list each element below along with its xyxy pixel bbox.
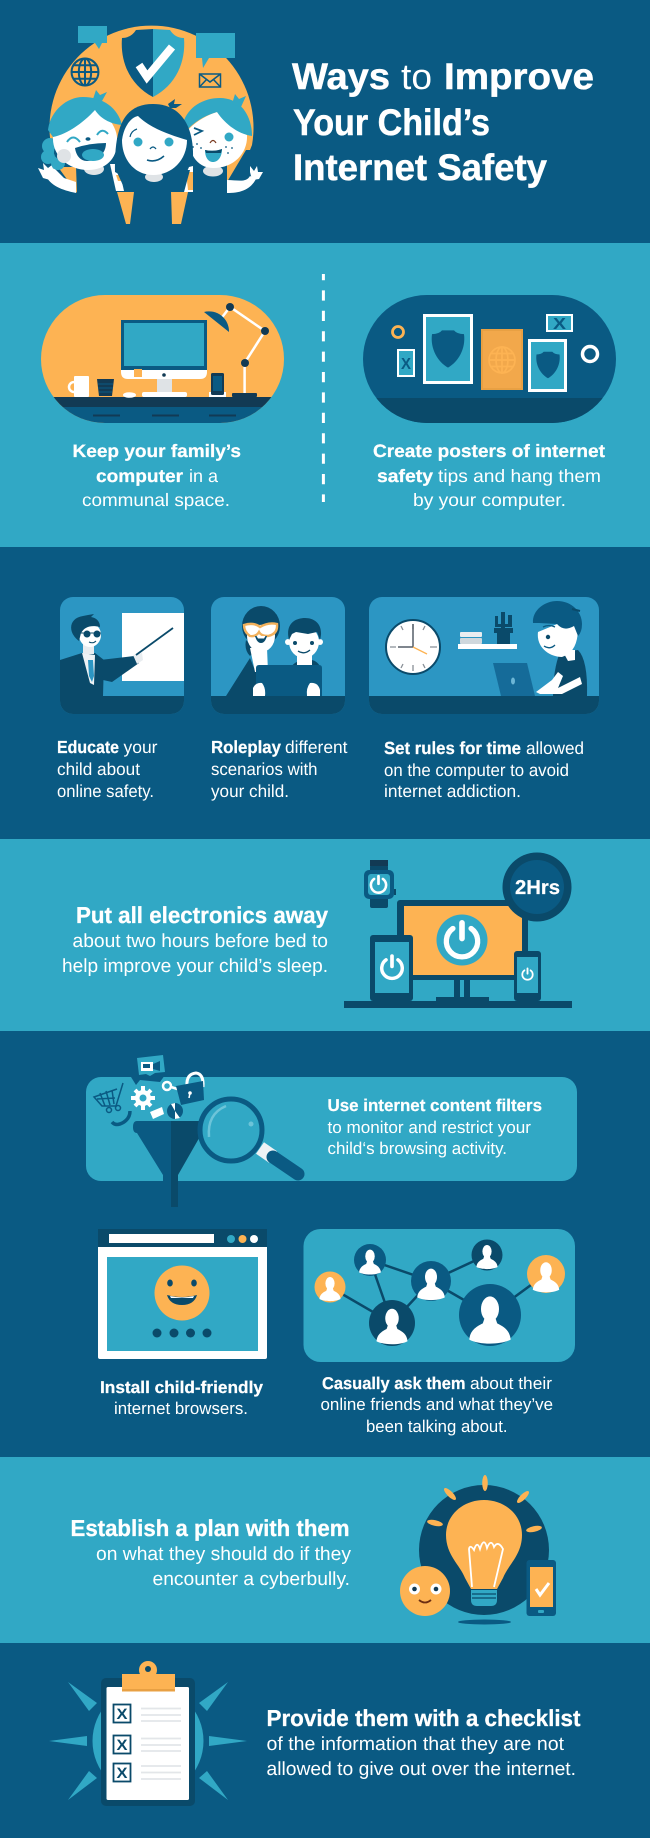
check items: X (116, 1706, 128, 1723)
text: set rules: allowed (526, 738, 584, 758)
laptop (493, 663, 535, 696)
cup (97, 379, 114, 396)
smiley face (154, 1266, 210, 1320)
panel: clock and boy at laptop (369, 597, 599, 714)
text: casually ask: online friends and what they’ve (320, 1395, 553, 1414)
clip (122, 1661, 175, 1692)
panel: roleplay (211, 597, 345, 714)
node 1 (314, 1272, 346, 1302)
text: establish a plan: encounter a cyberbully. (152, 1569, 350, 1590)
child centre (110, 99, 193, 224)
lamp (204, 303, 269, 397)
panel: teacher (60, 597, 184, 714)
text: casually ask (320, 1374, 553, 1436)
monitor (121, 320, 207, 397)
title: Improve (444, 56, 594, 97)
text: create posters: by your computer. (413, 490, 566, 510)
white board (122, 613, 184, 681)
check items: X (116, 1765, 128, 1782)
badge: 2Hrs (502, 852, 572, 922)
text: create posters: safety (377, 466, 433, 486)
teal band 5 background (0, 1457, 650, 1643)
text: put all electronics away (62, 902, 328, 977)
icon: envelope (200, 74, 220, 87)
text: put all electronics away: Put all electronics away (76, 902, 328, 928)
icon: key (163, 1082, 187, 1096)
panel: online friends network (304, 1229, 575, 1362)
divider: dashed line (322, 274, 325, 502)
face (400, 1566, 450, 1616)
phone (209, 373, 226, 397)
text: content filters (328, 1096, 542, 1158)
phone with check (526, 1560, 556, 1616)
text: keep computer in communal space: computer (96, 466, 183, 486)
text: educate: online safety. (57, 781, 154, 801)
funnel (133, 1121, 202, 1207)
node 4 (411, 1261, 451, 1301)
text: educate (57, 737, 158, 801)
text: set rules (384, 738, 584, 801)
icon: lock (176, 1073, 204, 1105)
text: casually ask: about their (470, 1374, 552, 1393)
text: create posters (373, 441, 605, 510)
woman (226, 606, 284, 696)
header background (0, 0, 650, 243)
dark band 4 background (0, 1031, 650, 1457)
teal band 1 background (0, 243, 650, 547)
text: educate: your (124, 737, 158, 757)
mouse (123, 392, 136, 398)
text: child-friendly browsers (100, 1378, 264, 1418)
text: set rules: Set rules for time (384, 738, 521, 758)
poster: x left (398, 350, 414, 376)
illustration: devices (344, 852, 572, 1008)
bulb rays (427, 1475, 542, 1533)
magnifying glass (200, 1099, 298, 1174)
boy (285, 618, 323, 665)
illustration: child-friendly browser (98, 1229, 267, 1359)
desk bar (344, 1001, 572, 1008)
teacher figure (60, 614, 173, 696)
text: roleplay: your child. (211, 781, 289, 801)
text: establish a plan (70, 1515, 352, 1590)
text: child-friendly browsers: Install child-friendly (100, 1378, 264, 1397)
text: create posters: tips and hang them (438, 466, 601, 486)
check items (114, 1704, 181, 1782)
text: establish a plan: on what they should do if they (96, 1544, 352, 1565)
icon: gear (131, 1086, 155, 1110)
icon: video bubble (131, 1055, 165, 1085)
text: provide checklist: Provide them with a checklist (266, 1705, 581, 1731)
tablet and hands (253, 665, 322, 696)
text: put all electronics away: help improve your child’s sleep. (62, 956, 328, 977)
text: educate: child about (57, 759, 140, 779)
poster: x top: X (553, 316, 566, 333)
icon: shield with check (122, 29, 184, 97)
phone (514, 951, 541, 1001)
text: content filters: child‘s browsing activity. (328, 1139, 507, 1158)
text: educate: Educate (57, 737, 119, 757)
poster: large shield (424, 316, 472, 382)
text: child-friendly browsers: internet browsers. (114, 1399, 248, 1418)
title: Internet Safety (293, 147, 547, 188)
title: Ways (292, 56, 390, 97)
text: casually ask: Casually ask them (322, 1374, 466, 1393)
poster: globe (481, 329, 523, 390)
text: establish a plan: Establish a plan with them (70, 1515, 350, 1541)
text: keep computer in communal space (72, 441, 241, 510)
icon: envelope (150, 1107, 164, 1119)
title: Your Child’s (293, 102, 490, 143)
shelf (458, 644, 517, 649)
board (101, 1678, 195, 1806)
poster: small shield (530, 340, 566, 390)
books (460, 632, 482, 644)
text: provide checklist: of the information that they are not (266, 1734, 565, 1755)
node 2 (354, 1244, 386, 1276)
icon: disc (167, 1103, 183, 1119)
dark band 2 background (0, 547, 650, 839)
tablet (370, 935, 413, 1001)
speech bubble right (196, 33, 235, 68)
node 6 (459, 1284, 521, 1346)
cactus (494, 612, 513, 644)
check items: X (116, 1737, 128, 1754)
child right (183, 94, 263, 193)
title (292, 56, 594, 188)
illustration: light bulb with face and phone (400, 1475, 556, 1624)
orange ring (392, 326, 404, 338)
text: set rules: internet addiction. (384, 781, 521, 801)
boy (533, 601, 587, 696)
text: keep computer in communal space: communal space. (82, 490, 230, 510)
text: keep computer in communal space: Keep your family’s (72, 441, 241, 461)
orange backdrop circle (50, 26, 254, 150)
badge: 2Hrs: 2Hrs (515, 877, 560, 899)
illustration: funnel with magnifier (94, 1055, 298, 1207)
desk (54, 397, 272, 423)
watch (364, 860, 396, 908)
child left (38, 90, 122, 193)
poster: x left: X (401, 356, 411, 373)
text: roleplay (211, 737, 348, 801)
text: set rules: on the computer to avoid (384, 760, 569, 780)
text: roleplay: different (285, 737, 348, 757)
monitor (397, 900, 528, 1001)
illustration: three children with safety shield (38, 26, 263, 224)
paper (106, 1687, 189, 1800)
clock (386, 620, 440, 674)
title: to (401, 56, 432, 97)
illustration: clipboard checklist with rays (49, 1661, 247, 1806)
text: content filters: to monitor and restrict your (328, 1118, 531, 1137)
illustration: computer desk pill (41, 295, 284, 423)
mug (69, 376, 89, 397)
text: roleplay: scenarios with (211, 759, 318, 779)
icon: phone handset (112, 1111, 130, 1124)
text: create posters: Create posters of internet (373, 441, 605, 461)
icon: cart (94, 1083, 123, 1112)
bulb (446, 1500, 522, 1606)
poster: x top (547, 315, 572, 333)
panel: content filters (86, 1077, 577, 1181)
text: put all electronics away: about two hours before bed to (72, 931, 328, 952)
text: provide checklist: allowed to give out over the internet. (266, 1759, 576, 1780)
text: content filters: Use internet content filters (328, 1096, 542, 1115)
rays and circle (49, 1682, 247, 1800)
node 7 (527, 1255, 565, 1293)
speech bubble left (78, 26, 107, 49)
white ring (582, 346, 598, 362)
node 3 (369, 1300, 415, 1346)
illustration: posters pill (363, 295, 616, 423)
text: casually ask: been talking about. (366, 1417, 508, 1436)
node 5 (472, 1240, 502, 1270)
icon: globe (72, 59, 98, 85)
dark band 6 background (0, 1643, 650, 1838)
text: keep computer in communal space: in a (189, 466, 219, 486)
teal band 3 background (0, 839, 650, 1031)
password dots (152, 1328, 212, 1338)
text: roleplay: Roleplay (211, 737, 281, 757)
text: provide checklist (266, 1705, 581, 1780)
